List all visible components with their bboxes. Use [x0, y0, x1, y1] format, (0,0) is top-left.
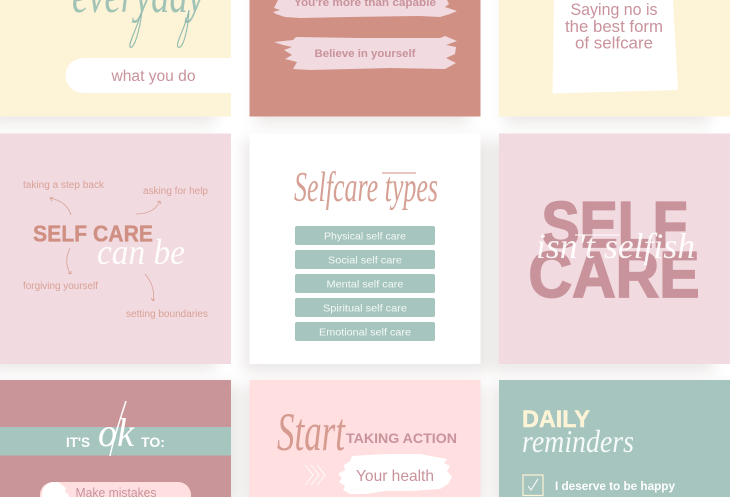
note text: Saying no is: [570, 1, 658, 19]
pill: what you do: what you do: [110, 68, 196, 85]
script: start: Start: [277, 402, 346, 462]
script: isn't selfish: isn't selfish: [536, 226, 695, 266]
labels: taking a step back: [23, 180, 105, 191]
pill: what you do: [66, 58, 231, 93]
brush: your health: Your health: [356, 468, 434, 485]
flourish: descender loops: [130, 10, 189, 47]
icon: checkbox: [523, 475, 543, 496]
type list: [295, 226, 435, 341]
script: reminders: reminders: [522, 423, 634, 459]
sticky note: [552, 0, 678, 94]
panel: saying no card: [499, 0, 730, 116]
type list: Emotional self care: [319, 326, 411, 338]
subheading: taking action: TAKING ACTION: [346, 431, 457, 446]
panel: start taking action: [250, 380, 480, 497]
labels: setting boundaries: [126, 309, 208, 320]
heading: self: SELF: [542, 188, 688, 261]
script: can be: can be: [97, 232, 185, 272]
flourish: k stem: [110, 401, 126, 456]
panel: self care isn't selfish: [499, 134, 730, 364]
labels: forgiving yourself: [23, 281, 98, 292]
reminder text: I deserve to be happy: [555, 481, 676, 493]
panel: self care can be: [0, 134, 231, 364]
type list: Physical self care: [324, 230, 406, 242]
brush: your health: [338, 454, 452, 494]
labels: [23, 180, 208, 320]
type list: Social self care: [328, 254, 402, 266]
icon: chevrons: [305, 465, 325, 485]
panel: daily reminders: [499, 380, 730, 497]
pill: make mistakes: [40, 482, 191, 497]
script title: Selfcare types: [294, 165, 438, 211]
panel: everyday card: [0, 0, 231, 116]
teal band: [0, 427, 231, 456]
band text: [66, 434, 165, 450]
arrows: [50, 197, 161, 301]
script: ok: ok: [98, 410, 135, 455]
type list: Spiritual self care: [323, 302, 407, 314]
heading: daily: DAILY: [522, 406, 590, 433]
heading: care: CARE: [528, 238, 700, 311]
type list: Mental self care: [326, 278, 404, 290]
brush label: believe in yourself: Believe in yourself: [314, 48, 416, 60]
panel: affirmations card: [250, 0, 480, 116]
brush label: you're more than capable: [273, 0, 457, 18]
panel: it's ok to: [0, 380, 231, 497]
band text: IT'S: [66, 434, 90, 450]
band text: TO:: [141, 434, 165, 450]
note text: of selfcare: [575, 34, 653, 52]
flourish: t-bar: [575, 234, 620, 236]
labels: asking for help: [143, 186, 208, 197]
heading: self care: SELF CARE: [33, 220, 153, 246]
panel: selfcare types: [250, 134, 480, 364]
brush label: believe in yourself: [274, 36, 457, 70]
flourish: t-bar: [382, 172, 416, 174]
note text: the best form: [565, 18, 663, 36]
note text: [565, 1, 663, 52]
